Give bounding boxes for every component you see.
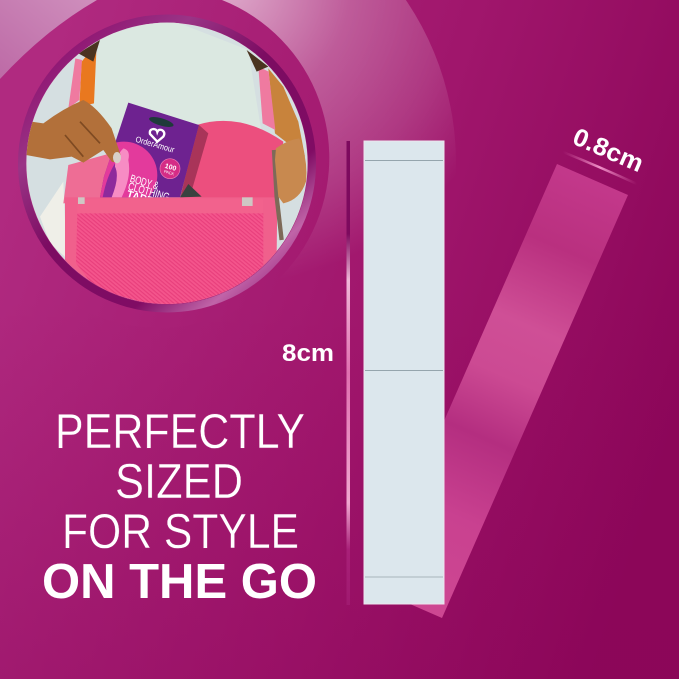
knuckle shading	[65, 122, 100, 157]
tape pack	[100, 102, 208, 198]
top fold line	[365, 160, 443, 162]
pack title	[128, 174, 170, 198]
bottom fold line	[365, 576, 443, 578]
headline	[42, 405, 317, 609]
length label 8cm: 8cm	[282, 340, 334, 367]
headline line four: ON THE GO	[42, 555, 317, 609]
logo heart	[150, 129, 164, 142]
tilted tape strip	[371, 164, 628, 618]
white shopping bag	[40, 182, 67, 258]
width label 0.8cm: 0.8cm	[569, 123, 648, 178]
headline line one: PERFECTLY	[55, 405, 305, 459]
orange strap	[80, 52, 96, 104]
fingernail	[113, 152, 121, 163]
outer magenta ring	[0, 0, 329, 328]
bag lower body	[65, 197, 277, 310]
bag chain	[274, 150, 282, 240]
middle fold line	[365, 370, 443, 372]
left hand	[20, 100, 121, 163]
light halo circle behind photo	[48, 0, 455, 254]
body silhouette shadow	[103, 163, 118, 197]
badge label: PACK	[163, 169, 175, 176]
right hand	[275, 138, 306, 203]
headline line three: FOR STYLE	[62, 505, 299, 559]
width marker line	[563, 152, 637, 184]
photo backdrop	[20, 17, 313, 310]
bag back panel	[180, 121, 283, 203]
title line two: CLOTHING	[126, 181, 171, 204]
100 pack badge	[160, 159, 180, 179]
title line one: BODY &	[128, 173, 160, 193]
pack pink circle	[100, 142, 158, 198]
bag contents	[180, 184, 202, 197]
length marker line	[346, 141, 350, 605]
white backing strip	[364, 141, 444, 604]
right pink strap	[258, 67, 275, 130]
top-left light corner	[0, 0, 97, 79]
left pink strap	[68, 58, 82, 108]
badge number: 100	[164, 163, 177, 173]
title line three: TAPE ST	[125, 189, 170, 212]
zip stud right	[242, 197, 253, 206]
photo: hand slipping tape pack into pink bag	[20, 17, 313, 310]
headline line two: SIZED	[115, 455, 243, 509]
tank top	[93, 18, 262, 133]
pocket mesh	[76, 213, 263, 308]
hang hole	[149, 117, 174, 127]
brand name: OrderAmour	[134, 134, 176, 155]
pack shadow on bag	[180, 125, 208, 197]
pocket zip trim	[80, 213, 263, 214]
inner dark ring	[22, 18, 312, 308]
bag front-left panel	[63, 154, 110, 204]
zip stud left	[78, 197, 85, 204]
body silhouette	[112, 148, 129, 197]
woman's right shoulder	[268, 68, 305, 157]
hair tips	[78, 40, 268, 72]
